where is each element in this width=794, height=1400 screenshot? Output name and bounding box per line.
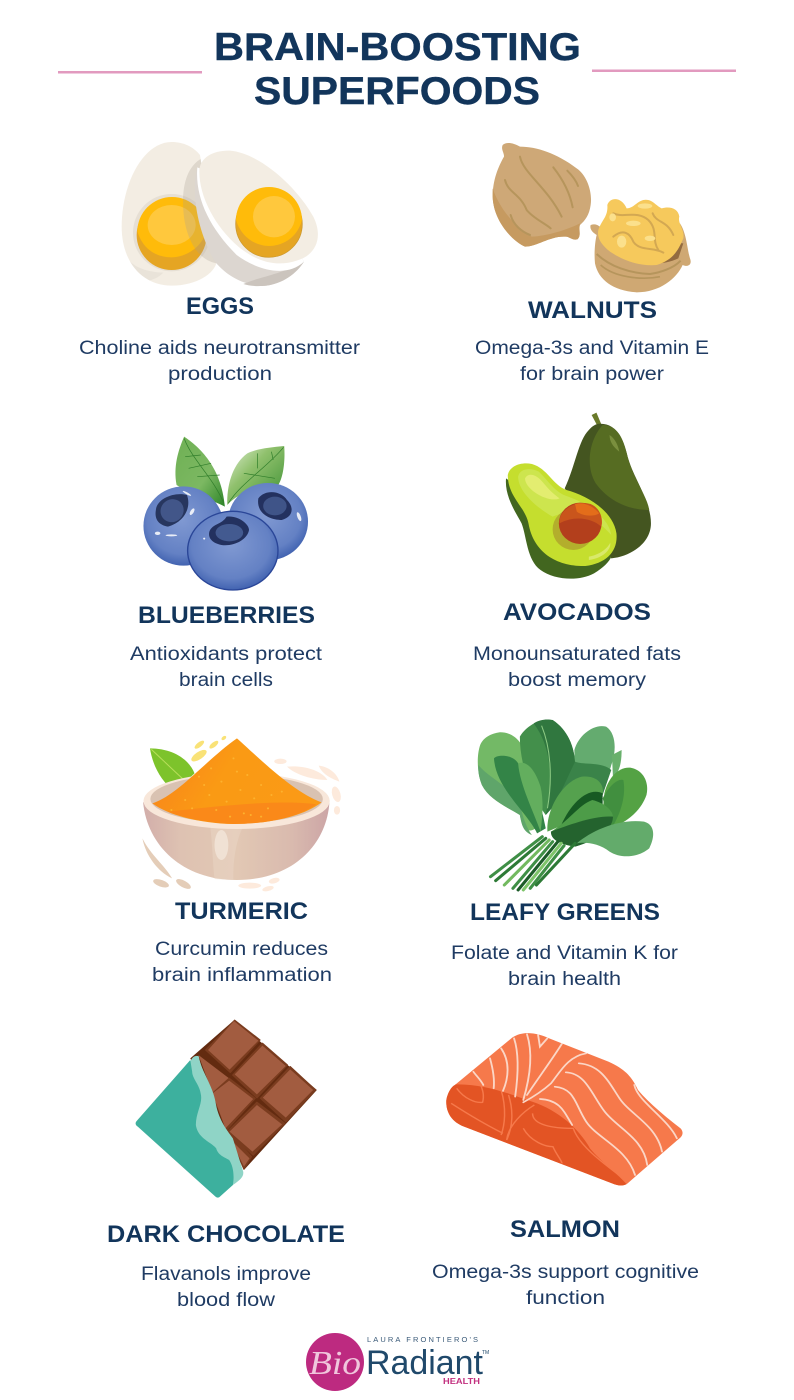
title: BRAIN-BOOSTING xyxy=(214,26,581,69)
logo: Radiant xyxy=(366,1344,484,1382)
text: salmon: Omega-3s support cognitive xyxy=(432,1262,699,1283)
heading: avocados: AVOCADOS xyxy=(503,599,651,626)
title: SUPERFOODS xyxy=(254,70,540,113)
text: avocados: boost memory xyxy=(508,670,647,691)
text: eggs: production xyxy=(168,364,272,385)
text: leafy greens xyxy=(451,943,679,990)
text: turmeric xyxy=(152,939,332,986)
text: blueberries: brain cells xyxy=(179,670,273,691)
text: turmeric: Curcumin reduces xyxy=(155,939,328,960)
panel: walnuts xyxy=(475,143,709,385)
text: blueberries: Antioxidants protect xyxy=(130,644,323,665)
icon: turmeric bowl xyxy=(142,735,342,892)
title xyxy=(214,26,581,113)
text: dark chocolate: blood flow xyxy=(177,1290,275,1311)
text: walnuts: Omega-3s and Vitamin E xyxy=(475,338,709,359)
text: eggs: Choline aids neurotransmitter xyxy=(79,338,361,359)
panel: dark chocolate xyxy=(107,1020,345,1311)
panel: turmeric xyxy=(142,735,342,986)
text: eggs xyxy=(79,338,361,385)
text: walnuts xyxy=(475,338,709,385)
icon: salmon fillet xyxy=(446,1033,683,1186)
icon: chocolate bar xyxy=(136,1020,317,1198)
panel: leafy greens xyxy=(451,719,679,990)
panel: avocados xyxy=(473,413,681,691)
text: avocados: Monounsaturated fats xyxy=(473,644,681,665)
heading: walnuts: WALNUTS xyxy=(528,297,657,324)
icon: avocado xyxy=(506,413,651,579)
icon: eggs xyxy=(120,142,318,286)
logo: Bio xyxy=(309,1345,361,1382)
text: dark chocolate xyxy=(141,1264,311,1311)
text: walnuts: for brain power xyxy=(520,364,665,385)
text: dark chocolate: Flavanols improve xyxy=(141,1264,311,1285)
icon: walnuts xyxy=(493,143,691,292)
logo xyxy=(306,1333,489,1391)
text: turmeric: brain inflammation xyxy=(152,965,332,986)
panel: blueberries xyxy=(130,437,323,691)
text: leafy greens: Folate and Vitamin K for xyxy=(451,943,679,964)
logo: TM xyxy=(482,1350,489,1356)
heading: turmeric: TURMERIC xyxy=(175,898,308,925)
heading: salmon: SALMON xyxy=(510,1216,620,1243)
heading: dark chocolate: DARK CHOCOLATE xyxy=(107,1221,345,1248)
panel: salmon xyxy=(432,1028,699,1309)
panel: eggs xyxy=(79,142,361,385)
icon: spinach xyxy=(478,719,653,890)
heading: eggs: EGGS xyxy=(186,293,254,320)
logo: LAURA FRONTIERO'S xyxy=(367,1335,478,1344)
text: salmon xyxy=(432,1262,699,1309)
text: leafy greens: brain health xyxy=(508,969,621,990)
text: avocados xyxy=(473,644,681,691)
icon: blueberries xyxy=(143,437,308,590)
text: salmon: function xyxy=(526,1288,605,1309)
text: blueberries xyxy=(130,644,323,691)
heading: leafy greens: LEAFY GREENS xyxy=(470,899,660,926)
heading: blueberries: BLUEBERRIES xyxy=(138,602,315,629)
logo: HEALTH xyxy=(443,1376,480,1386)
